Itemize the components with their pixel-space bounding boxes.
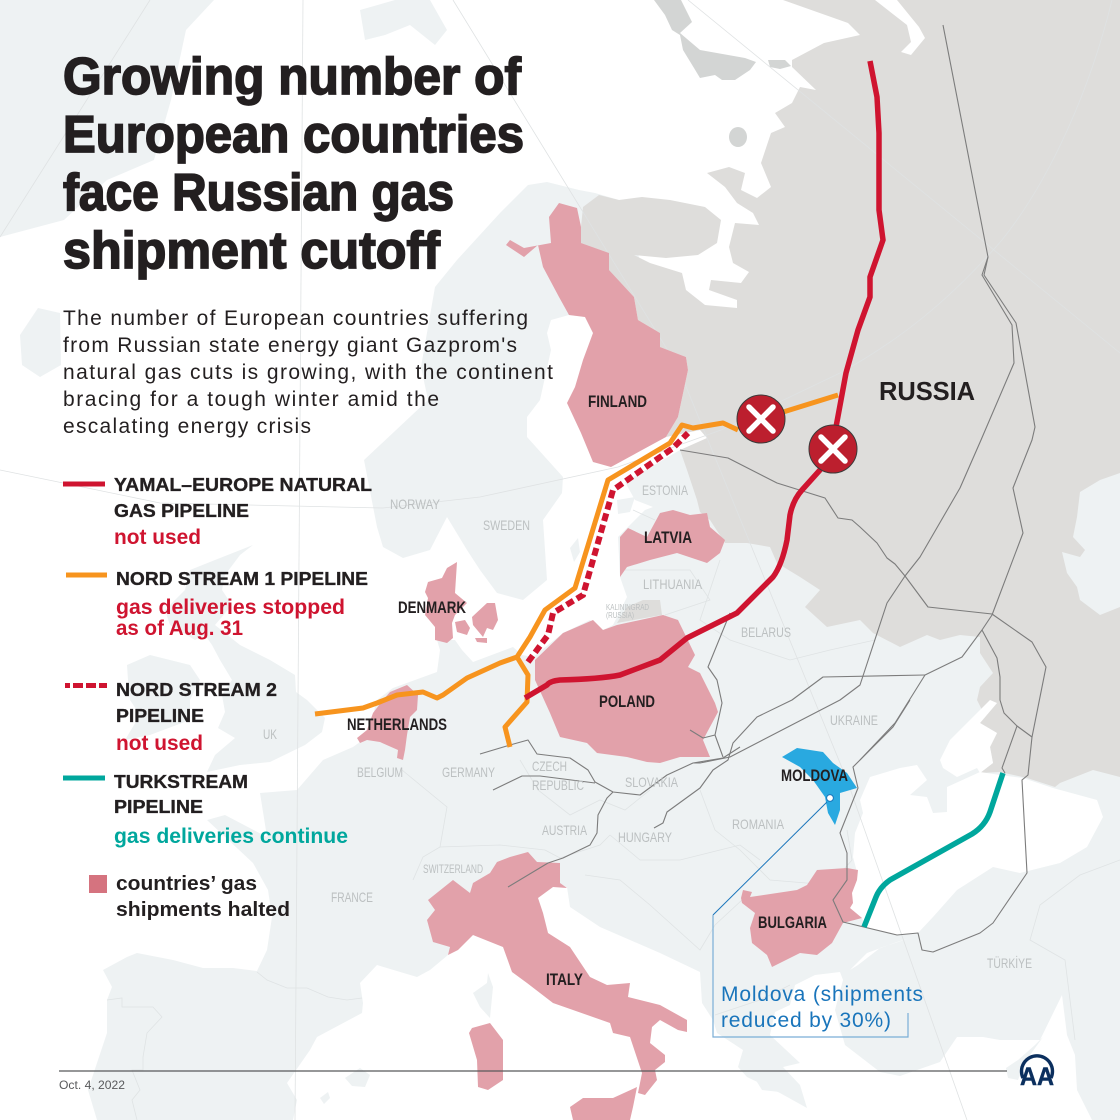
pale country labels: UK (263, 726, 277, 742)
icon: blocked Yamal-Europe (809, 425, 857, 473)
description: from Russian state energy giant Gazprom's (63, 334, 517, 357)
pale country labels: (RUSSIA) (606, 611, 634, 620)
land: Kaliningrad (617, 600, 662, 623)
pale country labels: AUSTRIA (542, 822, 587, 838)
legend: Nord Stream 1: as of Aug. 31 (116, 617, 243, 640)
land: Baltic and Mediterranean islands (320, 497, 1043, 1104)
callout: Moldova (713, 795, 923, 1037)
description: natural gas cuts is growing, with the continent (63, 361, 553, 384)
pale country labels: LITHUANIA (643, 576, 703, 592)
description: escalating energy crisis (63, 415, 311, 438)
land: Britain (165, 545, 325, 772)
legend: Yamal-Europe (63, 474, 372, 549)
halted countries (357, 203, 862, 1120)
title: shipment cutoff (63, 222, 441, 280)
pale country labels: NORWAY (390, 496, 441, 512)
country labels: NETHERLANDS (347, 716, 447, 734)
country: Netherlands (357, 685, 418, 760)
country labels: BULGARIA (758, 914, 827, 932)
legend: Nord Stream 2 (65, 679, 277, 755)
pale country labels: HUNGARY (618, 829, 673, 845)
legend: Nord Stream 1: gas deliveries stopped (116, 596, 345, 619)
pipeline: Nord Stream 2 (528, 433, 688, 662)
callout: Moldova: Moldova (shipments (721, 983, 923, 1006)
legend: TurkStream (63, 771, 348, 848)
callout: Moldova: reduced by 30%) (721, 1009, 891, 1032)
pale country labels: KALININGRAD (606, 603, 649, 612)
pale country labels: BELGIUM (357, 764, 403, 780)
sea: Azov (940, 700, 997, 777)
legend: Nord Stream 1: NORD STREAM 1 PIPELINE (116, 568, 368, 589)
pale country labels: REPUBLIC (532, 777, 584, 793)
legend: Yamal-Europe: GAS PIPELINE (114, 500, 249, 521)
description: The number of European countries suffering (63, 307, 528, 330)
pale country labels: GERMANY (442, 764, 495, 780)
country: Denmark (425, 562, 498, 643)
legend: TurkStream: gas deliveries continue (114, 825, 348, 848)
title: European countries (63, 106, 524, 164)
pipeline: Nord Stream 1 (315, 395, 838, 747)
legend: Nord Stream 2: PIPELINE (116, 705, 204, 726)
legend: Nord Stream 2: not used (116, 732, 203, 755)
country labels: MOLDOVA (781, 767, 848, 785)
legend: TurkStream: PIPELINE (114, 796, 203, 817)
pale country labels: SWEDEN (483, 517, 530, 533)
icon: blocked Nord Stream 1 (737, 395, 785, 443)
pipeline: Yamal-Europe (525, 61, 883, 698)
land: Iceland (20, 308, 61, 377)
pale country labels: SLOVAKIA (625, 774, 679, 790)
legend: halted countries: shipments halted (116, 898, 290, 921)
pale country labels: TÜRKİYE (987, 954, 1032, 971)
pale country labels: CZECH (532, 758, 567, 774)
pale country labels: SWITZERLAND (423, 864, 483, 876)
legend: Nord Stream 1 (66, 568, 368, 640)
pale country labels: ROMANIA (732, 816, 785, 832)
description (63, 307, 553, 438)
icon: AA logo: AA (1020, 1063, 1054, 1091)
footer rule (59, 1070, 1007, 1072)
country labels: DENMARK (398, 599, 466, 617)
sea: Black Sea (850, 765, 1103, 935)
sea: Ob gulf (875, 0, 925, 55)
land: Novaya Zemlya (654, 0, 756, 80)
title: Growing number of (63, 48, 522, 106)
legend: Nord Stream 2: NORD STREAM 2 (116, 679, 277, 700)
country: Poland (535, 615, 718, 763)
sea: Marmara (850, 938, 910, 970)
legend: Yamal-Europe: YAMAL–EUROPE NATURAL (114, 474, 372, 495)
legend: TurkStream: TURKSTREAM (114, 771, 248, 792)
legend (63, 474, 372, 921)
legend: halted countries: countries’ gas (116, 872, 257, 895)
land: Ireland (125, 655, 200, 740)
gas network lines (480, 25, 1046, 952)
pale country labels: UKRAINE (830, 712, 878, 728)
country: Bulgaria (741, 868, 862, 967)
country labels: FINLAND (588, 393, 647, 411)
pale country labels: FRANCE (331, 889, 373, 905)
country: Finland (506, 203, 688, 467)
pipeline: TurkStream (864, 773, 1003, 927)
land: continental Europe and Türkiye (88, 450, 1120, 1120)
country labels: RUSSIA (879, 378, 975, 406)
pale country labels: ESTONIA (642, 482, 688, 498)
title: face Russian gas (63, 164, 454, 222)
pale country labels (263, 482, 1032, 971)
date: Oct. 4, 2022 (59, 1078, 125, 1092)
pale country labels: BELARUS (741, 624, 791, 640)
title (63, 48, 524, 280)
country: Italy (427, 852, 687, 1120)
land: Russia (581, 0, 1120, 787)
country: Latvia (620, 510, 725, 577)
land: Scandinavia (364, 182, 640, 600)
legend: Yamal-Europe: not used (114, 526, 201, 549)
legend: halted countries (89, 872, 290, 921)
land: Kazakhstan (1062, 473, 1120, 615)
country labels: POLAND (599, 693, 655, 711)
land: Svalbard (360, 0, 447, 45)
country labels: LATVIA (644, 529, 692, 547)
description: bracing for a tough winter amid the (63, 388, 439, 411)
country labels: ITALY (546, 971, 583, 989)
country labels (347, 378, 975, 989)
country: Moldova (782, 748, 857, 825)
land: Greenland (0, 0, 214, 237)
